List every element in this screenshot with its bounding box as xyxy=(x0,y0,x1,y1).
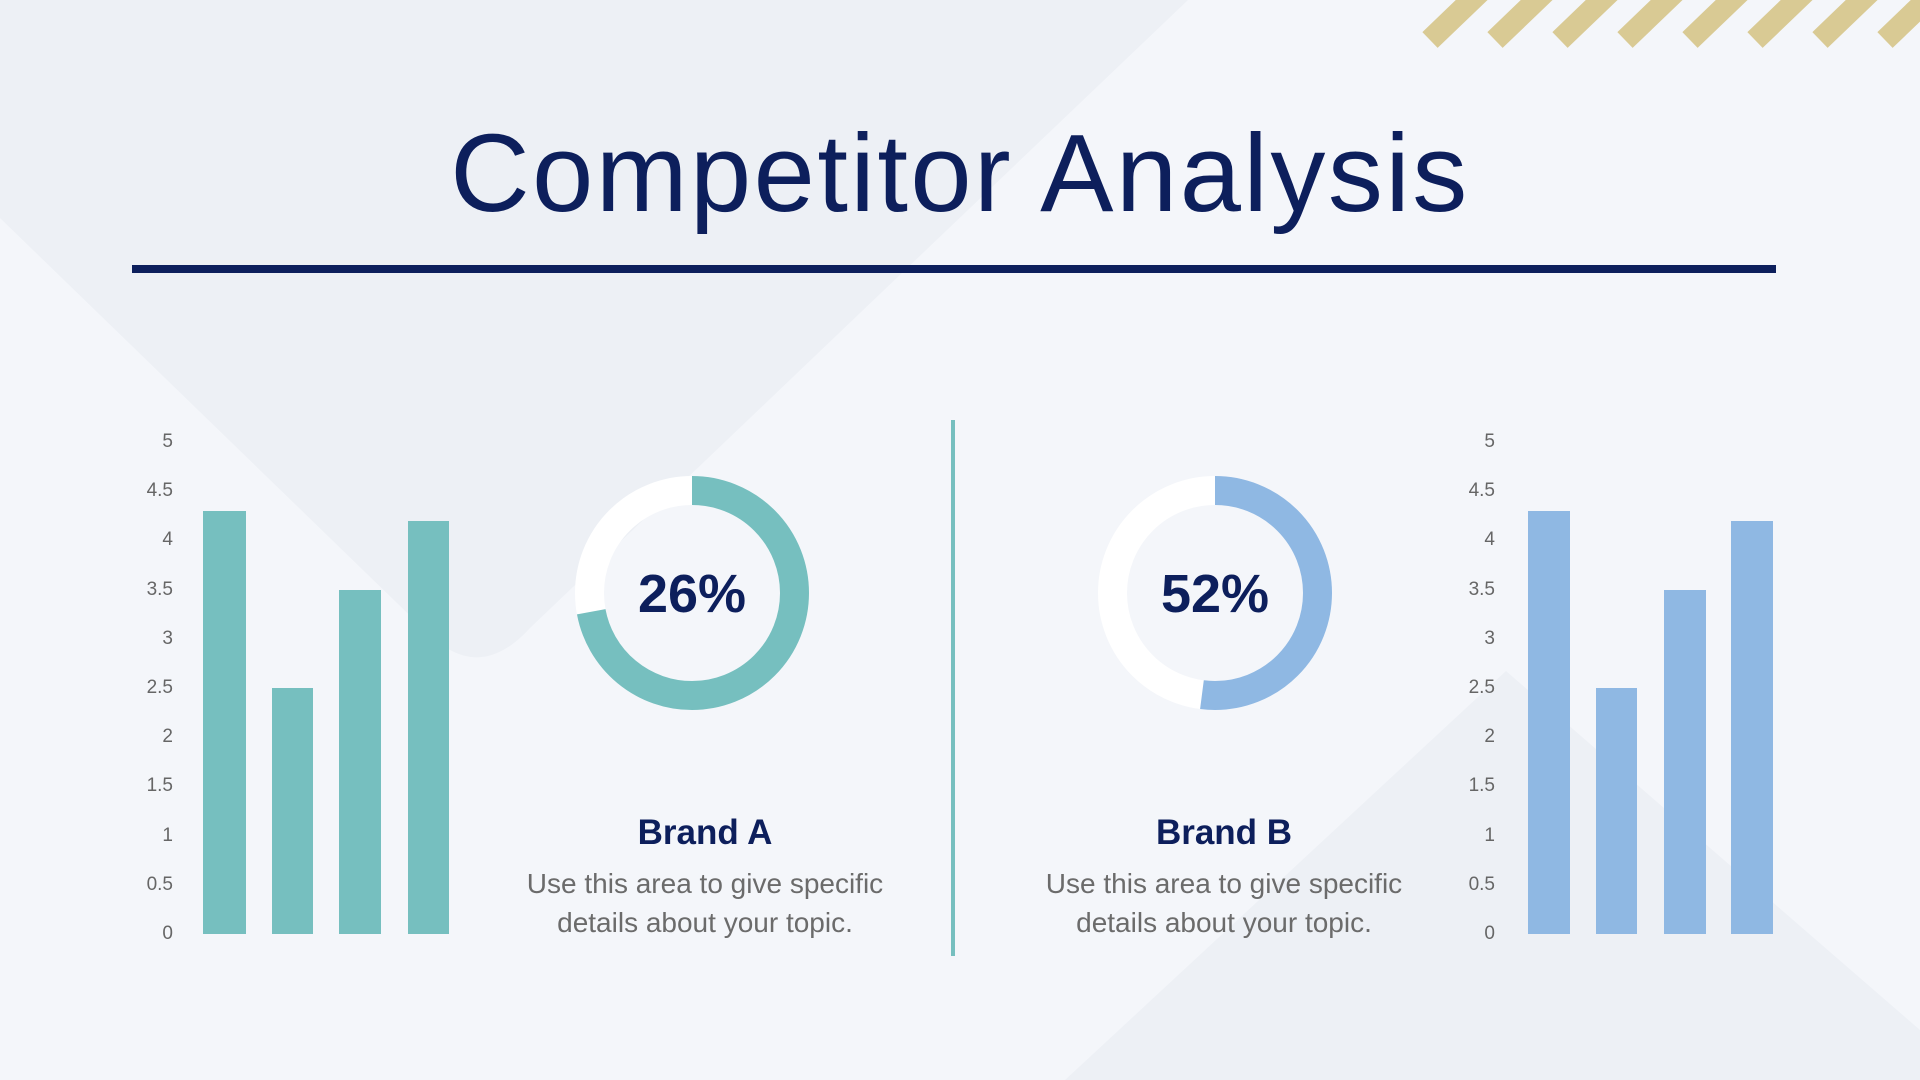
bar chart: Brand B: 3.5 xyxy=(1469,579,1495,600)
title underline xyxy=(132,265,1776,273)
donut: Brand A 26%: 26% xyxy=(638,564,746,624)
Brand A description: Use this area to give specific xyxy=(527,868,883,899)
Brand A description xyxy=(527,868,883,938)
vertical divider xyxy=(951,420,955,956)
donut: Brand B 52%: 52% xyxy=(1161,564,1269,624)
bar chart: Brand B: 1.5 xyxy=(1469,775,1495,796)
bar chart: Brand B: 4.5 xyxy=(1469,480,1495,501)
bar chart: Brand B: 4 xyxy=(1484,529,1495,550)
bar chart: Brand B xyxy=(1469,431,1773,944)
Brand B description: Use this area to give specific xyxy=(1046,868,1402,899)
bar chart: Brand A: 4 xyxy=(162,529,173,550)
donut: Brand A 26% xyxy=(575,476,809,710)
bar chart: Brand A: 1 xyxy=(162,825,173,846)
Brand A label: Brand A xyxy=(638,813,772,852)
bar chart: Brand B: 3 xyxy=(1484,628,1495,649)
Brand B description: details about your topic. xyxy=(1076,907,1372,938)
Brand A description: details about your topic. xyxy=(557,907,853,938)
bar chart: Brand A: 2 xyxy=(162,726,173,747)
bar chart: Brand B: 2 xyxy=(1484,726,1495,747)
decorative stripes xyxy=(1422,0,1920,48)
donut: Brand B 52% xyxy=(1098,476,1332,710)
Brand B label: Brand B xyxy=(1156,813,1292,852)
bar chart: Brand B: 5 xyxy=(1484,431,1495,452)
bar chart: Brand A: 2.5 xyxy=(147,677,173,698)
bar chart: Brand A: 5 xyxy=(162,431,173,452)
bar chart: Brand A: 4.5 xyxy=(147,480,173,501)
bar chart: Brand A xyxy=(147,431,449,944)
bar chart: Brand A: 3.5 xyxy=(147,579,173,600)
bar chart: Brand A: 3 xyxy=(162,628,173,649)
bar chart: Brand A: 0 xyxy=(162,923,173,944)
bar chart: Brand B: 0.5 xyxy=(1469,874,1495,895)
Brand B description xyxy=(1046,868,1402,938)
bar chart: Brand B: 1 xyxy=(1484,825,1495,846)
title: Competitor Analysis xyxy=(450,112,1470,235)
bar chart: Brand B: 0 xyxy=(1484,923,1495,944)
bar chart: Brand B: 2.5 xyxy=(1469,677,1495,698)
bar chart: Brand A: 1.5 xyxy=(147,775,173,796)
bar chart: Brand A: 0.5 xyxy=(147,874,173,895)
